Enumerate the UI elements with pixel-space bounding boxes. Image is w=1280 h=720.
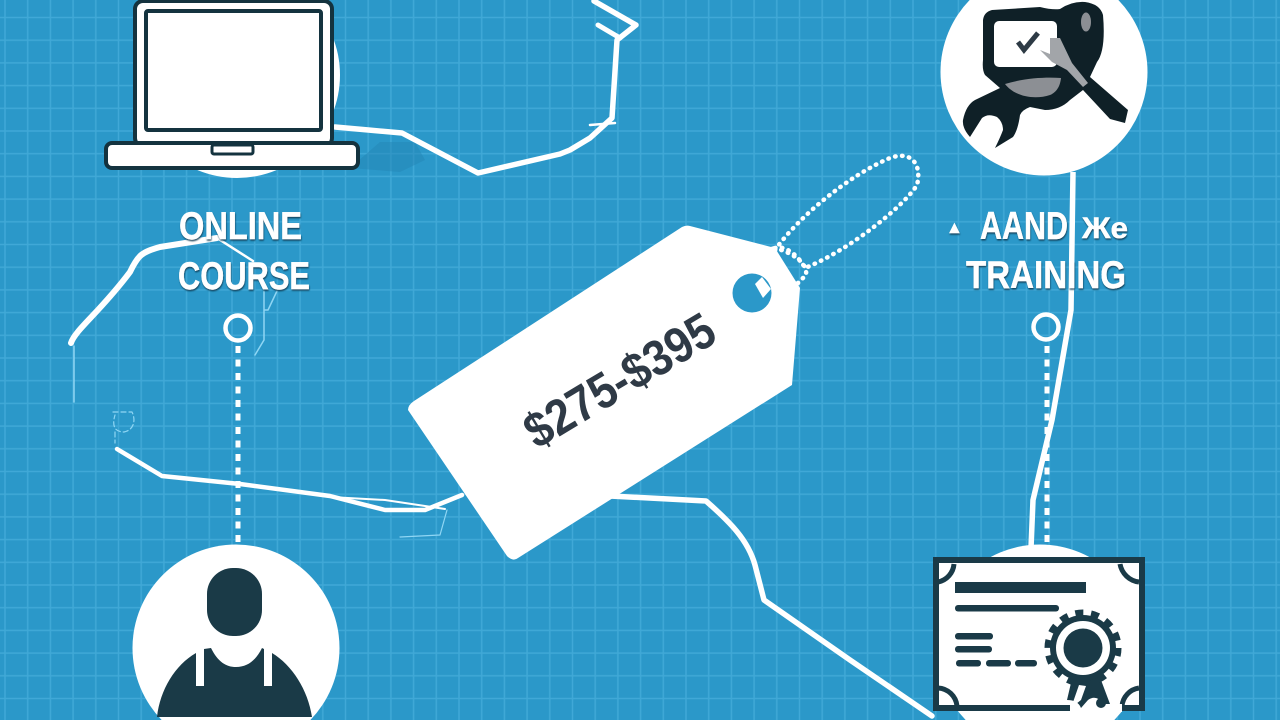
label: hands-on training: ▲ xyxy=(946,218,963,237)
connector: dotted right xyxy=(1044,346,1050,545)
label: hands-on training: AAND xyxy=(980,205,1068,248)
label: hands-on training: TRAINING xyxy=(966,254,1126,297)
connector: tag to certificate xyxy=(610,496,932,716)
label: online course: COURSE xyxy=(178,255,310,298)
tag price: $275-$395 xyxy=(514,302,725,459)
label: hands-on training xyxy=(946,205,1128,297)
laptop shadow xyxy=(350,142,425,172)
connector: wrench to certificate xyxy=(1031,172,1073,548)
label: online course: ONLINE xyxy=(179,205,302,248)
label: online course xyxy=(178,205,310,298)
node: right ring xyxy=(1034,314,1058,340)
node: left ring xyxy=(226,316,250,340)
tag hole xyxy=(732,274,772,312)
price tag string xyxy=(775,156,918,285)
icon: worker xyxy=(132,544,340,720)
tag body xyxy=(408,226,800,560)
icon: wrench and screen xyxy=(940,0,1148,176)
label: hands-on training: Же xyxy=(1081,212,1128,245)
icon: laptop xyxy=(106,0,358,178)
connector: dotted left xyxy=(236,346,240,545)
connector: left upper curve xyxy=(71,238,277,443)
icon: certificate xyxy=(936,544,1144,720)
connector: left lower curve to tag xyxy=(117,449,462,537)
connector: laptop to top curve xyxy=(335,1,636,173)
